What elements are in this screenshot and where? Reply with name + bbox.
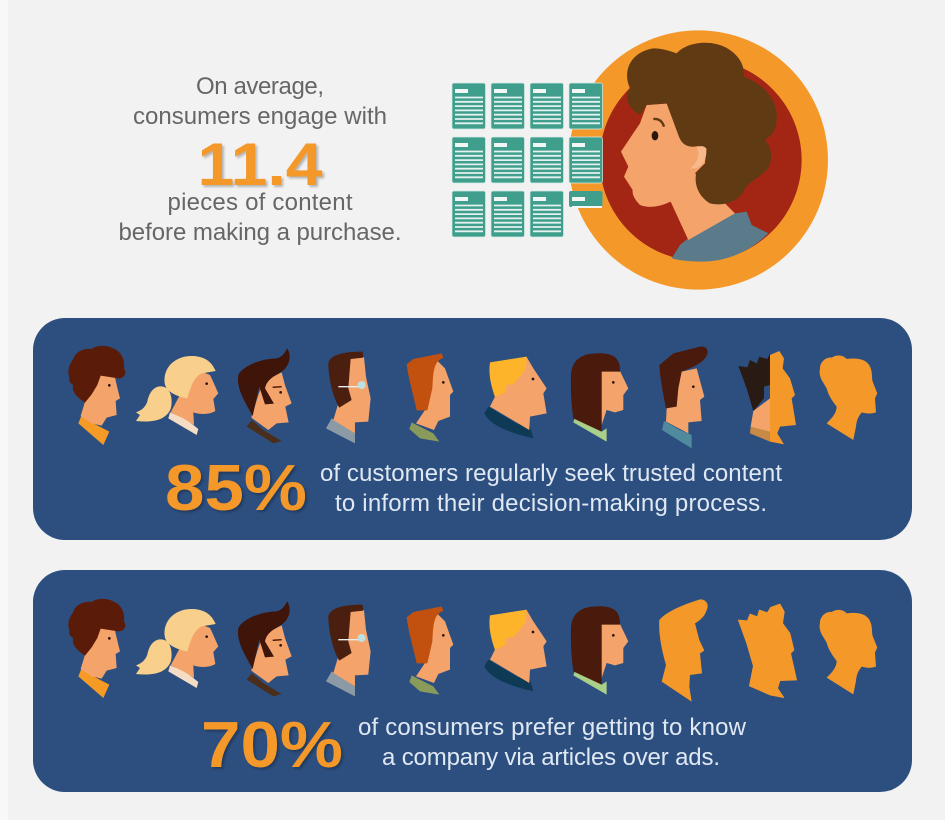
panel: 70% of consumers (33, 570, 912, 792)
head row: seven people, three silhouettes (68, 599, 877, 702)
stat description: a company via articles over ads. (382, 744, 720, 771)
content document grid (452, 83, 602, 237)
stat description: to inform their decision-making process. (335, 490, 767, 517)
intro text block: consumers engage with (133, 103, 387, 130)
panel: 85% of customers (33, 318, 912, 540)
stat description (358, 714, 747, 771)
big number: 11.4: 11.4 (198, 131, 323, 198)
stat description: of customers regularly seek trusted content (320, 460, 782, 487)
head row: eight people, mixed ninth, one silhouette (68, 346, 877, 448)
stat: 70%: 70% (201, 708, 343, 781)
stat description: of consumers prefer getting to know (358, 714, 747, 741)
intro text block (118, 73, 402, 246)
stat description (320, 460, 782, 517)
stat: 85%: 85% (165, 451, 307, 524)
intro text block: pieces of content (168, 189, 353, 216)
intro text block: On average, (196, 73, 324, 100)
intro text block: before making a purchase. (118, 219, 402, 246)
illustration: person in circle (569, 30, 828, 290)
